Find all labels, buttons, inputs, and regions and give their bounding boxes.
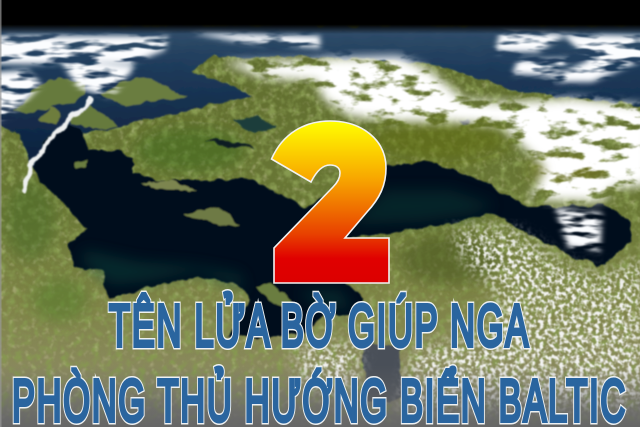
big number 2 [272, 121, 389, 283]
bottom grey fade [0, 365, 640, 427]
islands north west [15, 80, 85, 112]
diagonal cloud streak [24, 100, 92, 190]
speckled cloud field [295, 228, 640, 410]
lakes [233, 116, 277, 134]
grey strait [364, 345, 402, 402]
baltic sea [33, 125, 633, 337]
high wisps [0, 32, 640, 252]
north sea [0, 25, 640, 170]
main cloud bands [222, 56, 640, 202]
forest patches [5, 118, 610, 322]
water tints [82, 190, 495, 310]
space [0, 0, 640, 34]
